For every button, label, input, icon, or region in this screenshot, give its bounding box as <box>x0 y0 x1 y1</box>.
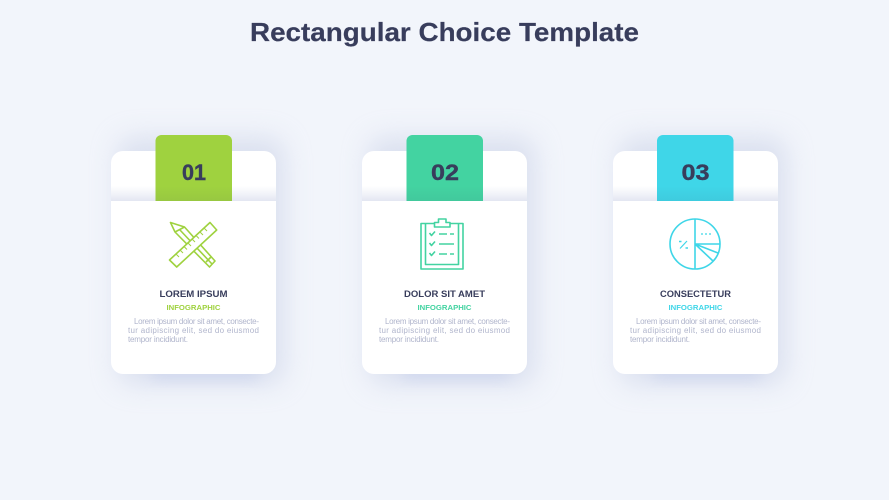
icon: pie chart <box>670 219 720 269</box>
text block <box>630 317 761 344</box>
label: infographic: INFOGRAPHIC <box>668 303 723 312</box>
label: heading: LOREM IPSUM <box>160 289 228 300</box>
text block: tur adipiscing elit, sed do eiusmod <box>128 326 259 335</box>
tab: number 03: 03 <box>682 160 710 185</box>
icon: clipboard checklist <box>421 219 463 269</box>
text block: tempor incididunt. <box>630 335 690 344</box>
label: heading: CONSECTETUR <box>660 289 731 300</box>
text block: tur adipiscing elit, sed do eiusmod <box>630 326 761 335</box>
label: infographic: INFOGRAPHIC <box>166 303 221 312</box>
text block: Lorem ipsum dolor sit amet, consecte- <box>385 317 510 326</box>
text block: Lorem ipsum dolor sit amet, consecte- <box>636 317 761 326</box>
text block: Lorem ipsum dolor sit amet, consecte- <box>134 317 259 326</box>
tab: number 01: 01 <box>182 160 206 185</box>
text block <box>379 317 510 344</box>
tab: number 03 <box>657 135 734 201</box>
tab: number 02: 02 <box>431 160 459 185</box>
tab: number 01 <box>156 135 232 201</box>
tab: number 02 <box>406 135 483 201</box>
text block: tur adipiscing elit, sed do eiusmod <box>379 326 510 335</box>
text block: tempor incididunt. <box>379 335 439 344</box>
text block <box>128 317 259 344</box>
panel: card 02 <box>362 135 536 385</box>
text block: tempor incididunt. <box>128 335 188 344</box>
panel: card 01 <box>111 135 285 385</box>
icon: crossed pencil and ruler <box>170 222 217 267</box>
label: infographic: INFOGRAPHIC <box>418 303 472 312</box>
label: heading: DOLOR SIT AMET <box>404 289 485 300</box>
panel: card 03 <box>613 135 787 385</box>
title: Rectangular Choice Template <box>250 17 639 47</box>
